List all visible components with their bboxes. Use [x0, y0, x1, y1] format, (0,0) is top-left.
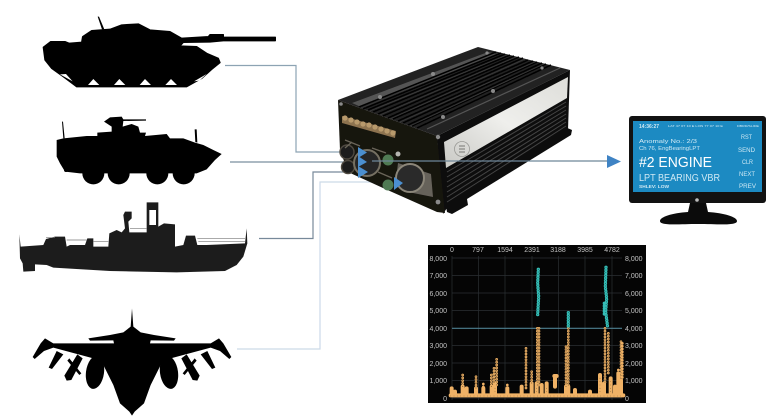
icon: fighter jet silhouette	[33, 308, 231, 416]
gold coaxial connector row	[342, 115, 396, 138]
monitor stand	[660, 203, 737, 224]
chart top axis labels: 2391	[524, 247, 540, 254]
chart left axis labels: 7,000	[429, 273, 447, 280]
connector line: armored vehicle to unit	[230, 161, 360, 163]
chart right axis labels: 8,000	[625, 256, 643, 263]
chart grid	[452, 256, 622, 400]
chart left axis labels: 4,000	[429, 326, 447, 333]
monitor screen	[633, 121, 762, 192]
chart top axis labels: 3985	[577, 247, 593, 254]
icon: armored vehicle silhouette	[57, 117, 222, 184]
icon: naval ship silhouette	[19, 202, 247, 272]
connector line: ship to unit	[259, 172, 360, 238]
chart right axis labels	[625, 256, 643, 403]
screen text readout: Ch 76, EngBearingLPT	[639, 146, 701, 152]
screen text readout: SHLEV: LOW	[639, 184, 670, 189]
screen text readout: CLR	[742, 159, 753, 166]
chart right axis labels: 2,000	[625, 361, 643, 368]
chart top axis labels	[450, 247, 620, 254]
anomalous data points above threshold	[538, 267, 608, 327]
output arrow to display	[372, 155, 621, 168]
chart left axis labels: 5,000	[429, 308, 447, 315]
mounting bolts	[339, 51, 544, 204]
line chart panel	[428, 245, 646, 403]
screen text readout: #2 ENGINE	[639, 154, 712, 171]
chart left axis labels	[429, 256, 447, 403]
chart right axis labels: 1,000	[625, 378, 643, 385]
chart right axis labels: 4,000	[625, 326, 643, 333]
device mounting flange	[445, 127, 572, 214]
screen text readout: PREV	[739, 183, 757, 190]
threshold line at 4,000	[452, 327, 622, 329]
monitor display	[629, 116, 766, 224]
chart right axis labels: 7,000	[625, 273, 643, 280]
chart top axis labels: 0	[450, 247, 454, 254]
normal data points	[451, 328, 623, 396]
circular connector: small left lower	[342, 160, 354, 174]
monitor bezel	[629, 116, 766, 203]
device front face	[338, 100, 445, 213]
connector plate and large connector	[396, 163, 433, 197]
chart left axis labels: 3,000	[429, 343, 447, 350]
device: data acquisition unit	[338, 47, 572, 214]
device side face	[437, 70, 570, 214]
screen text readout: SEND	[738, 147, 755, 154]
chart data series	[451, 267, 623, 396]
connector line: tank to unit	[225, 66, 360, 152]
chart left axis labels: 1,000	[429, 378, 447, 385]
icon: tank silhouette	[43, 17, 275, 87]
connector line: jet to unit	[237, 182, 396, 349]
circular connector: center	[354, 150, 380, 176]
screen text readout: 14:36:27	[639, 124, 659, 130]
chart right axis labels: 0	[625, 396, 629, 403]
screen text readout: LPT BEARING VBR	[639, 173, 720, 184]
device top face	[338, 47, 570, 136]
chart left axis labels: 8,000	[429, 256, 447, 263]
green connector caps	[382, 154, 394, 166]
port speckle texture	[345, 140, 392, 178]
chart top axis labels: 1594	[497, 247, 513, 254]
screen text readout: Anomaly No.: 2/3	[639, 139, 697, 145]
chart top axis labels: 3188	[550, 247, 566, 254]
chart right axis labels: 3,000	[625, 343, 643, 350]
chart top axis labels: 4782	[604, 247, 620, 254]
chart right axis labels: 6,000	[625, 291, 643, 298]
screen text readout: DBRD/SLIDE	[737, 124, 759, 128]
blue input arrowheads	[358, 147, 403, 190]
chart left axis labels: 0	[443, 396, 447, 403]
screen text readout: LAT 47 07 10 E LON 77 07 10 E	[668, 124, 723, 128]
device white side band	[444, 77, 568, 168]
screen text readout: NEXT	[739, 171, 755, 178]
chart top axis labels: 797	[472, 247, 484, 254]
chart right axis labels: 5,000	[625, 308, 643, 315]
device side louvers	[447, 102, 566, 202]
circular connector: small left upper	[340, 145, 354, 159]
chart left axis labels: 2,000	[429, 361, 447, 368]
screen text readout: RST	[741, 134, 752, 141]
chart left axis labels: 6,000	[429, 291, 447, 298]
screen text readout	[639, 124, 759, 190]
